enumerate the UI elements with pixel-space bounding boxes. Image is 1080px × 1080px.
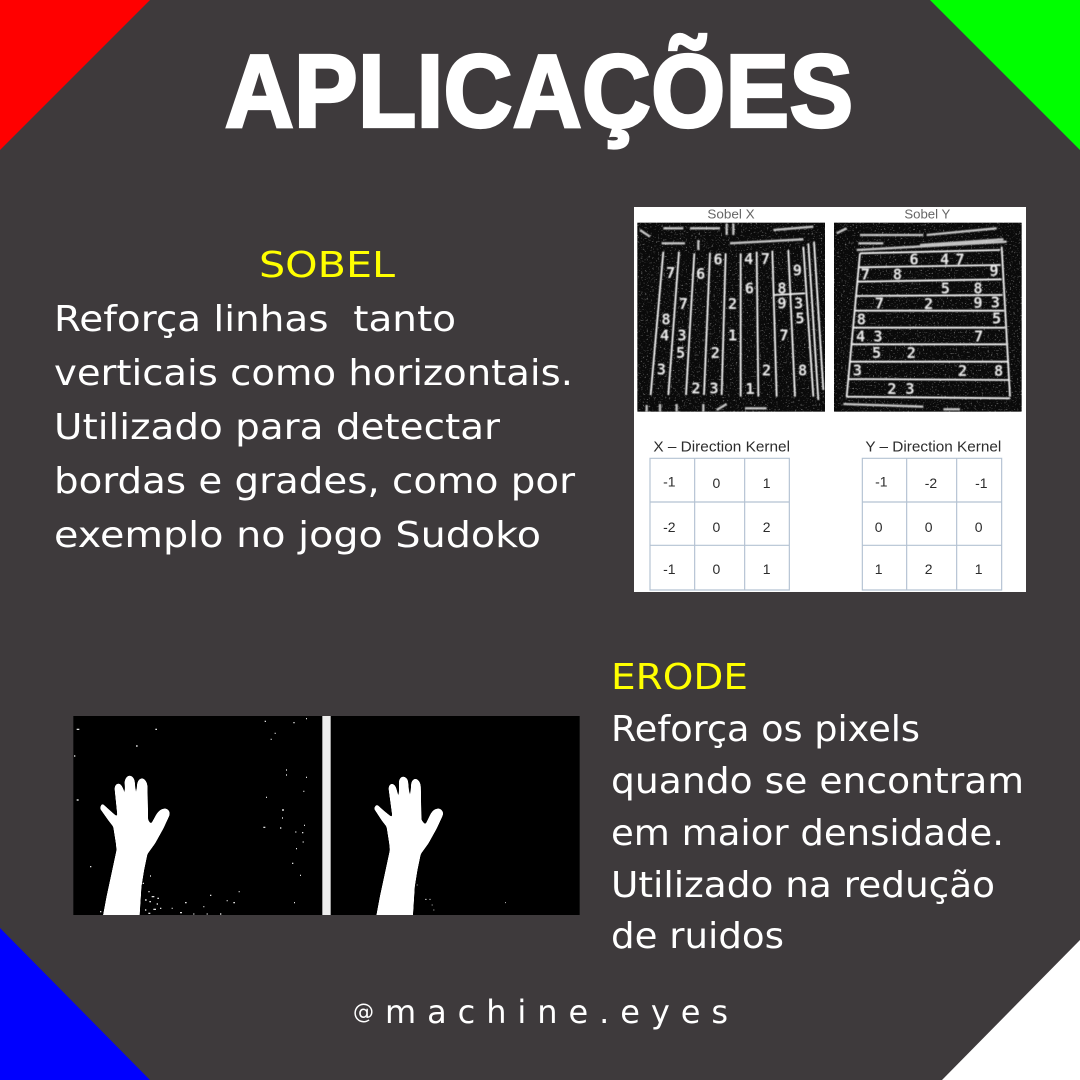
panel: Sobel X: 5 bbox=[676, 344, 685, 362]
panel: Sobel Y: 3 bbox=[905, 380, 915, 398]
description: Erode bbox=[611, 709, 1024, 957]
divider between before and after bbox=[322, 716, 331, 915]
noise speckles before erosion bbox=[74, 719, 307, 914]
table: Y direction kernel: Y – Direction Kernel bbox=[865, 439, 1001, 455]
panel: Sobel Y: 8 bbox=[893, 265, 902, 283]
description: Sobel: Utilizado para detectar bbox=[54, 407, 500, 448]
hand before erosion bbox=[100, 776, 170, 923]
description: Erode: em maior densidade. bbox=[611, 813, 1004, 854]
table: X direction kernel: -2 bbox=[663, 519, 676, 535]
panel: Sobel X: 5 bbox=[795, 309, 805, 327]
corner: green triangle bbox=[930, 0, 1080, 150]
panel: Sobel Y: 5 bbox=[941, 279, 950, 297]
table: X direction kernel: 2 bbox=[763, 519, 771, 535]
table: Y direction kernel: 2 bbox=[925, 561, 933, 577]
table: Y direction kernel: -2 bbox=[925, 475, 937, 491]
panel: Sobel Y: 9 bbox=[973, 294, 983, 312]
panel: Sobel X: 3 bbox=[709, 379, 719, 397]
panel: Sobel X: 8 bbox=[777, 279, 787, 297]
panel: Sobel X: 9 bbox=[793, 261, 802, 279]
panel: Sobel X: 8 bbox=[798, 361, 807, 379]
description: Sobel: exemplo no jogo Sudoko bbox=[54, 515, 541, 556]
panel: Sobel X: Sobel X bbox=[707, 207, 755, 221]
description: Sobel: Reforça linhas tanto bbox=[54, 299, 456, 340]
panel: Sobel X: 1 bbox=[728, 327, 737, 345]
panel: Sobel X: 6 bbox=[696, 265, 705, 283]
table: Y direction kernel: 0 bbox=[975, 519, 983, 535]
panel: Sobel Y: 7 bbox=[955, 251, 965, 269]
panel: Sobel X: 3 bbox=[794, 295, 803, 313]
table: X direction kernel: 0 bbox=[712, 475, 720, 491]
image bottom edge mask bbox=[73, 915, 580, 925]
description: Sobel bbox=[54, 299, 575, 556]
panel: Sobel X: 4 bbox=[744, 250, 753, 268]
panel: Sobel Y: 3 bbox=[991, 293, 1000, 311]
panel: Sobel Y: 7 bbox=[861, 265, 870, 283]
description: Erode: Utilizado na redução bbox=[611, 865, 995, 906]
panel: Sobel Y: 2 bbox=[887, 380, 897, 398]
table: Y direction kernel: -1 bbox=[975, 475, 988, 491]
panel: Sobel Y: 2 bbox=[924, 295, 933, 313]
panel: Sobel Y: 8 bbox=[973, 279, 983, 297]
panel: Sobel Y: 7 bbox=[974, 327, 983, 345]
table: Y direction kernel: -1 bbox=[875, 474, 888, 490]
table: Y direction kernel: 0 bbox=[875, 519, 883, 535]
panel: Sobel Y: 4 bbox=[856, 327, 865, 345]
panel: Sobel X bbox=[637, 207, 825, 412]
hand after erosion bbox=[374, 777, 443, 923]
panel: Sobel Y: 5 bbox=[992, 309, 1001, 327]
panel: Sobel Y: 7 bbox=[875, 295, 884, 313]
panel: Sobel Y: Sobel Y bbox=[904, 207, 951, 221]
panel: Sobel Y: 6 bbox=[909, 251, 919, 269]
figure: Sobel results and kernels bbox=[634, 207, 1026, 592]
panel: Sobel Y: 8 bbox=[857, 311, 866, 329]
panel: Sobel Y: 8 bbox=[994, 362, 1003, 380]
table: X direction kernel: -1 bbox=[663, 474, 676, 490]
panel: Sobel X: 9 bbox=[777, 295, 787, 313]
table: X direction kernel: 1 bbox=[763, 561, 771, 577]
corner: white triangle bbox=[942, 940, 1080, 1080]
description: Erode: Reforça os pixels bbox=[611, 709, 920, 750]
panel: Sobel X: 8 bbox=[661, 311, 671, 329]
figure: Erode hand comparison bbox=[73, 716, 580, 925]
text block: Erode bbox=[611, 657, 1024, 957]
panel: Sobel X: 2 bbox=[711, 344, 720, 362]
panel: Sobel X: 7 bbox=[761, 250, 770, 268]
title: APLICAÇÕES bbox=[225, 33, 853, 148]
footer handle: @ bbox=[353, 1000, 374, 1024]
table: Y direction kernel bbox=[862, 439, 1002, 590]
panel: Sobel X: 6 bbox=[713, 251, 723, 269]
table: X direction kernel: X – Direction Kernel bbox=[653, 439, 790, 455]
panel: Sobel X: 7 bbox=[779, 327, 789, 345]
table: X direction kernel: -1 bbox=[663, 561, 676, 577]
panel: Sobel X: 6 bbox=[745, 279, 754, 297]
description: Sobel: verticais como horizontais. bbox=[54, 353, 573, 394]
table: Y direction kernel: 0 bbox=[925, 519, 933, 535]
panel: Sobel Y: 2 bbox=[958, 362, 967, 380]
panel: Sobel Y: 9 bbox=[989, 262, 999, 280]
table: Y direction kernel: 1 bbox=[875, 561, 883, 577]
panel: Sobel X: 2 bbox=[691, 379, 701, 397]
description: Erode: de ruidos bbox=[611, 916, 784, 957]
table: X direction kernel bbox=[650, 439, 790, 590]
residual speckles after erosion bbox=[417, 885, 506, 910]
panel: Sobel X: 4 bbox=[660, 327, 669, 345]
heading: Erode: ERODE bbox=[611, 657, 748, 698]
table: X direction kernel: 1 bbox=[763, 475, 771, 491]
panel: Sobel X: 2 bbox=[762, 361, 771, 379]
corner: blue triangle bbox=[0, 928, 150, 1080]
panel: Sobel Y: 2 bbox=[907, 344, 916, 362]
panel: Sobel X: 1 bbox=[745, 380, 755, 398]
description: Sobel: bordas e grades, como por bbox=[54, 461, 575, 502]
table: X direction kernel: 0 bbox=[712, 561, 720, 577]
panel: Sobel Y: 3 bbox=[873, 327, 883, 345]
panel: Sobel X: 7 bbox=[679, 295, 688, 313]
table: Y direction kernel: 1 bbox=[975, 561, 983, 577]
panel: Sobel Y: 4 bbox=[940, 251, 949, 269]
panel: Sobel Y bbox=[834, 207, 1022, 412]
footer handle: machine.eyes bbox=[385, 993, 728, 1031]
table: X direction kernel: 0 bbox=[712, 519, 720, 535]
panel: Sobel X: 7 bbox=[666, 264, 675, 282]
panel: Sobel X: 3 bbox=[677, 327, 687, 345]
panel: Sobel X: 2 bbox=[728, 295, 737, 313]
heading: Sobel: SOBEL bbox=[259, 245, 395, 286]
text block: Sobel bbox=[54, 245, 575, 556]
panel: Sobel Y: 5 bbox=[872, 344, 881, 362]
panel: Sobel Y: 3 bbox=[853, 361, 862, 379]
corner: red triangle bbox=[0, 0, 150, 150]
panel: Sobel X: 3 bbox=[657, 361, 666, 379]
description: Erode: quando se encontram bbox=[611, 761, 1024, 802]
